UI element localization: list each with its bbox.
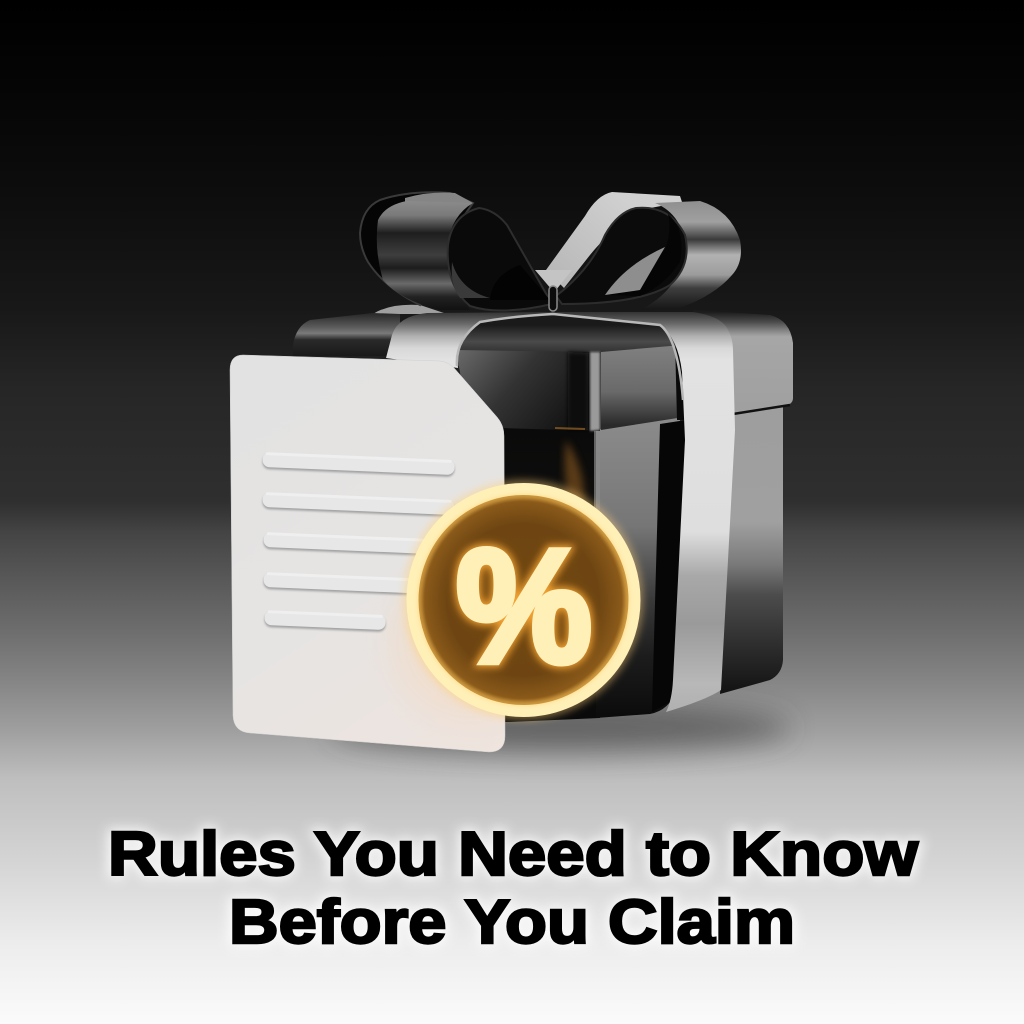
icon: percent coin — [403, 480, 643, 720]
warm coin light on document — [390, 602, 487, 720]
icon: document — [230, 354, 506, 752]
icon: gift box — [293, 192, 793, 722]
lid front left face — [456, 350, 600, 431]
lid left part — [293, 313, 400, 356]
bow left top strip — [405, 193, 473, 204]
title line 1: Rules You Need to Know — [108, 820, 919, 889]
document sheet — [230, 355, 505, 752]
corner highlight — [594, 430, 600, 580]
title glow — [107, 820, 920, 957]
amber reflection — [565, 440, 584, 510]
percent glyph: % — [456, 516, 592, 697]
lid side seam — [733, 405, 790, 414]
bow right inner reflection — [605, 247, 665, 295]
title glow: Before You Claim — [228, 888, 796, 957]
bow right inner ribbon — [610, 214, 682, 296]
percent glyph glow: % — [456, 516, 592, 697]
title — [107, 820, 920, 957]
black band beside ribbon — [652, 420, 686, 712]
ribbon back arc — [373, 305, 447, 314]
title line 2: Before You Claim — [229, 888, 795, 957]
coin disc — [412, 489, 634, 711]
bow left hole lower sheen — [452, 262, 490, 298]
bow knot top — [535, 270, 572, 290]
coin glow — [403, 480, 643, 720]
bow center dark fold — [490, 265, 550, 300]
box right side — [720, 400, 783, 694]
bow right loop band — [640, 201, 741, 310]
box front right face — [596, 416, 680, 718]
document line 2 — [262, 492, 455, 517]
lid right part — [693, 310, 793, 414]
floor shadow — [330, 704, 790, 752]
lid dark edge near ribbon — [675, 340, 684, 420]
document line 3 — [263, 532, 434, 556]
bow right hole — [556, 208, 687, 304]
lid front right face — [601, 345, 684, 430]
document line 5 — [264, 610, 386, 632]
bow knot — [549, 286, 557, 311]
ring inner glow — [420, 496, 628, 704]
document line 1 — [262, 452, 455, 477]
lid corner shade — [568, 352, 588, 430]
lid corner highlight — [590, 352, 600, 431]
lid top plane — [458, 318, 680, 362]
bow left loop back — [360, 192, 473, 305]
lid amber seam — [555, 428, 585, 429]
bow left loop band — [377, 201, 473, 310]
bow right strip — [546, 192, 682, 288]
document line 4 — [263, 572, 424, 596]
bow left hole — [448, 208, 552, 311]
title glow: Rules You Need to Know — [107, 820, 920, 889]
box front left face — [500, 425, 600, 722]
ribbon over lid and box — [386, 312, 735, 712]
ribbon inner edge — [457, 314, 683, 400]
